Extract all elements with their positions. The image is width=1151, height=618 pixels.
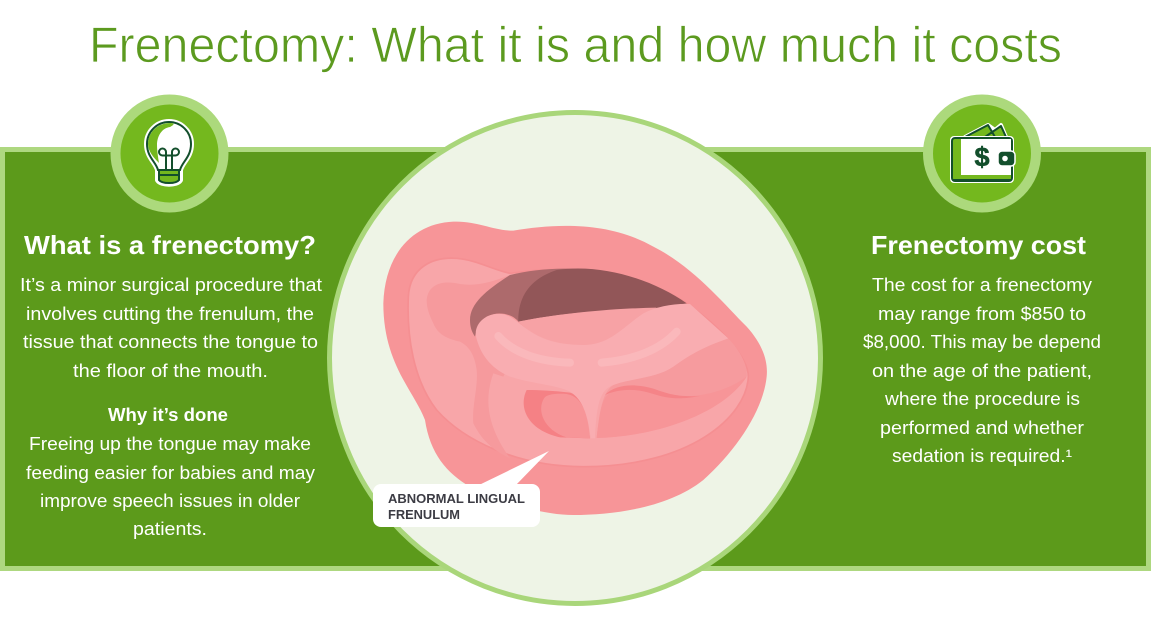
text block: cost details: where the procedure is: [884, 389, 1080, 409]
tongue: [476, 304, 728, 438]
heading: What is a frenectomy?: [24, 230, 316, 260]
icon: light bulb: [116, 100, 224, 208]
title: Frenectomy: What it is and how much it costs: [89, 17, 1062, 73]
left chamber: [524, 390, 590, 438]
text block: definition: the floor of the mouth.: [73, 361, 268, 381]
tongue highlights: [498, 332, 677, 363]
panel: green background band: [2, 150, 1148, 568]
text block: definition: It’s a minor surgical procedure that: [20, 275, 322, 295]
icon: wallet with dollar: [928, 100, 1036, 208]
inner cheek and fold: [427, 275, 537, 458]
callout: abnormal lingual frenulum: ABNORMAL LINGUAL: [388, 491, 525, 506]
text block: cost details: performed and whether: [880, 418, 1084, 438]
text block: cost details: The cost for a frenectomy: [872, 275, 1092, 295]
panel: central circle: [330, 112, 820, 604]
text block: cost details: sedation is required.¹: [892, 446, 1072, 466]
heading: Frenectomy cost: [871, 230, 1086, 260]
text block: why it's done: feeding easier for babies and may: [26, 463, 315, 483]
panel: what is a frenectomy: [20, 100, 322, 539]
text block: why it's done: Why it’s done: [108, 405, 228, 425]
illustration: open mouth with tongue raised: [383, 222, 767, 515]
mouth lining: [408, 258, 748, 467]
panel: frenectomy cost: [863, 100, 1101, 466]
lips: [383, 222, 767, 515]
text block: cost details: on the age of the patient,: [872, 361, 1092, 381]
callout: abnormal lingual frenulum: [373, 451, 549, 527]
back of mouth: [470, 269, 687, 337]
text block: cost details: [863, 275, 1101, 466]
text block: cost details: may range from $850 to: [878, 304, 1086, 324]
text block: why it's done: Freeing up the tongue may make: [29, 434, 311, 454]
tongue underside: [518, 308, 657, 345]
text block: definition: [20, 275, 322, 381]
text block: definition: involves cutting the frenulum, the: [26, 304, 314, 324]
sublingual fold: [605, 385, 700, 398]
floor of mouth right: [597, 338, 747, 438]
text block: definition: tissue that connects the tongue to: [23, 332, 318, 352]
text block: why it's done: patients.: [133, 519, 207, 539]
callout: abnormal lingual frenulum: FRENULUM: [388, 507, 460, 522]
text block: why it's done: [26, 405, 315, 539]
text block: why it's done: improve speech issues in older: [40, 491, 300, 511]
icon: wallet with dollar: $: [974, 142, 990, 172]
text block: cost details: $8,000. This may be depend: [863, 332, 1101, 352]
